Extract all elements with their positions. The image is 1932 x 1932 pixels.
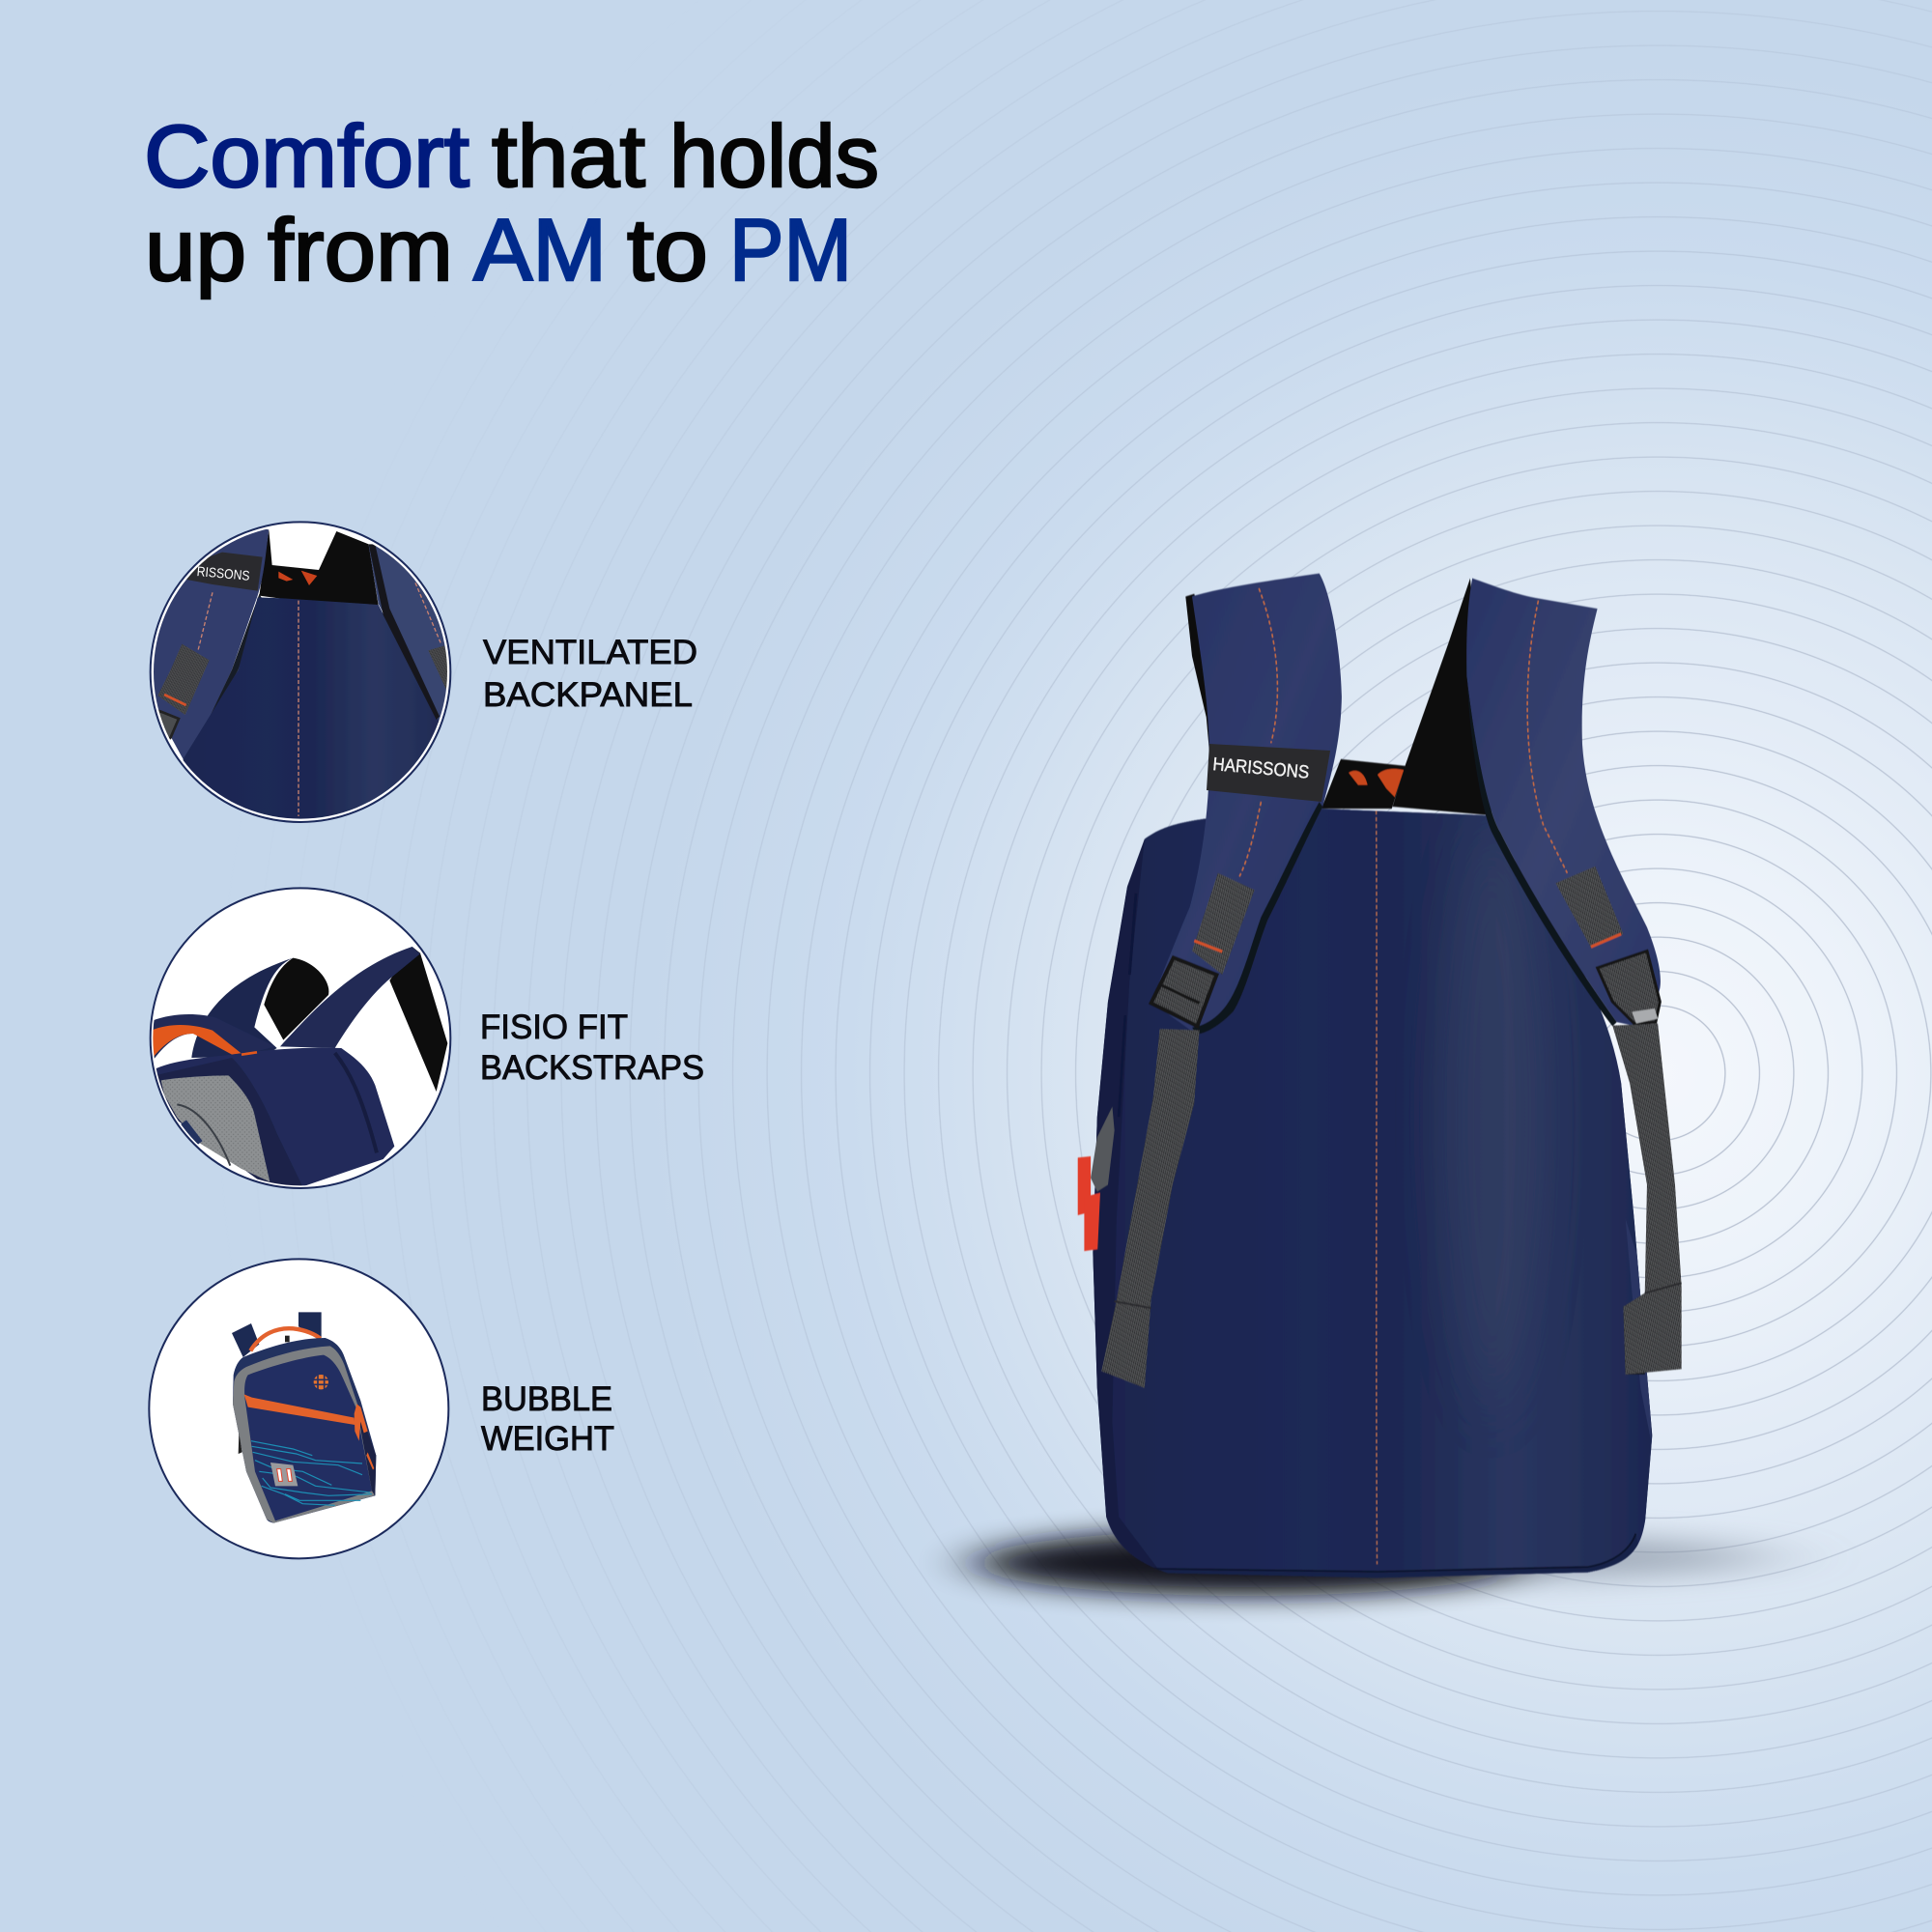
label: ventilated backpanel: VENTILATED: [483, 634, 697, 671]
title: that: [492, 108, 645, 206]
right webbing strap and buckle: [1555, 867, 1682, 1375]
circle image: back panel close-up: RISSONS: [196, 563, 250, 583]
title: up: [145, 202, 246, 299]
title: holds: [669, 108, 879, 206]
label: ventilated backpanel: BACKPANEL: [483, 676, 693, 714]
circle image: backstraps close-up: [148, 888, 450, 1188]
central seam stitch: [1376, 810, 1378, 1564]
feature 3: bubble weight: [149, 1259, 614, 1558]
circle image: back panel close-up: [148, 515, 457, 824]
ground shadow: [976, 1530, 1768, 1596]
label: bubble weight: WEIGHT: [481, 1420, 614, 1458]
label: bubble weight: [481, 1380, 614, 1458]
right shoulder strap: [1466, 579, 1661, 1029]
zipper pulls: [1078, 1107, 1115, 1251]
label: fisio fit backstraps: FISIO FIT: [480, 1009, 628, 1046]
label: fisio fit backstraps: BACKSTRAPS: [480, 1049, 704, 1087]
circle image: front of backpack: [149, 1259, 448, 1558]
left shoulder strap: [1151, 574, 1342, 1035]
title: AM: [473, 202, 607, 299]
logo: [314, 1375, 328, 1389]
label: fisio fit backstraps: [480, 1009, 704, 1087]
left webbing strap and buckle: [1101, 873, 1255, 1388]
title: [144, 108, 879, 299]
title: Comfort: [144, 108, 469, 206]
feature 2: fisio fit backstraps: [148, 888, 704, 1188]
title: to: [627, 202, 708, 299]
label: ventilated backpanel: [483, 634, 697, 714]
title: from: [268, 202, 453, 299]
label: bubble weight: BUBBLE: [481, 1380, 612, 1418]
strap brand label: HARISSONS: [1212, 754, 1310, 783]
main backpack, rear view: [1078, 574, 1682, 1584]
bag body: [1087, 806, 1656, 1584]
strap brand label: [1207, 744, 1330, 802]
feature 1: ventilated backpanel: [148, 515, 697, 824]
background with concentric rings: [493, 0, 1932, 1932]
title: PM: [729, 202, 852, 299]
inner black padding and orange mesh: [1185, 579, 1492, 815]
